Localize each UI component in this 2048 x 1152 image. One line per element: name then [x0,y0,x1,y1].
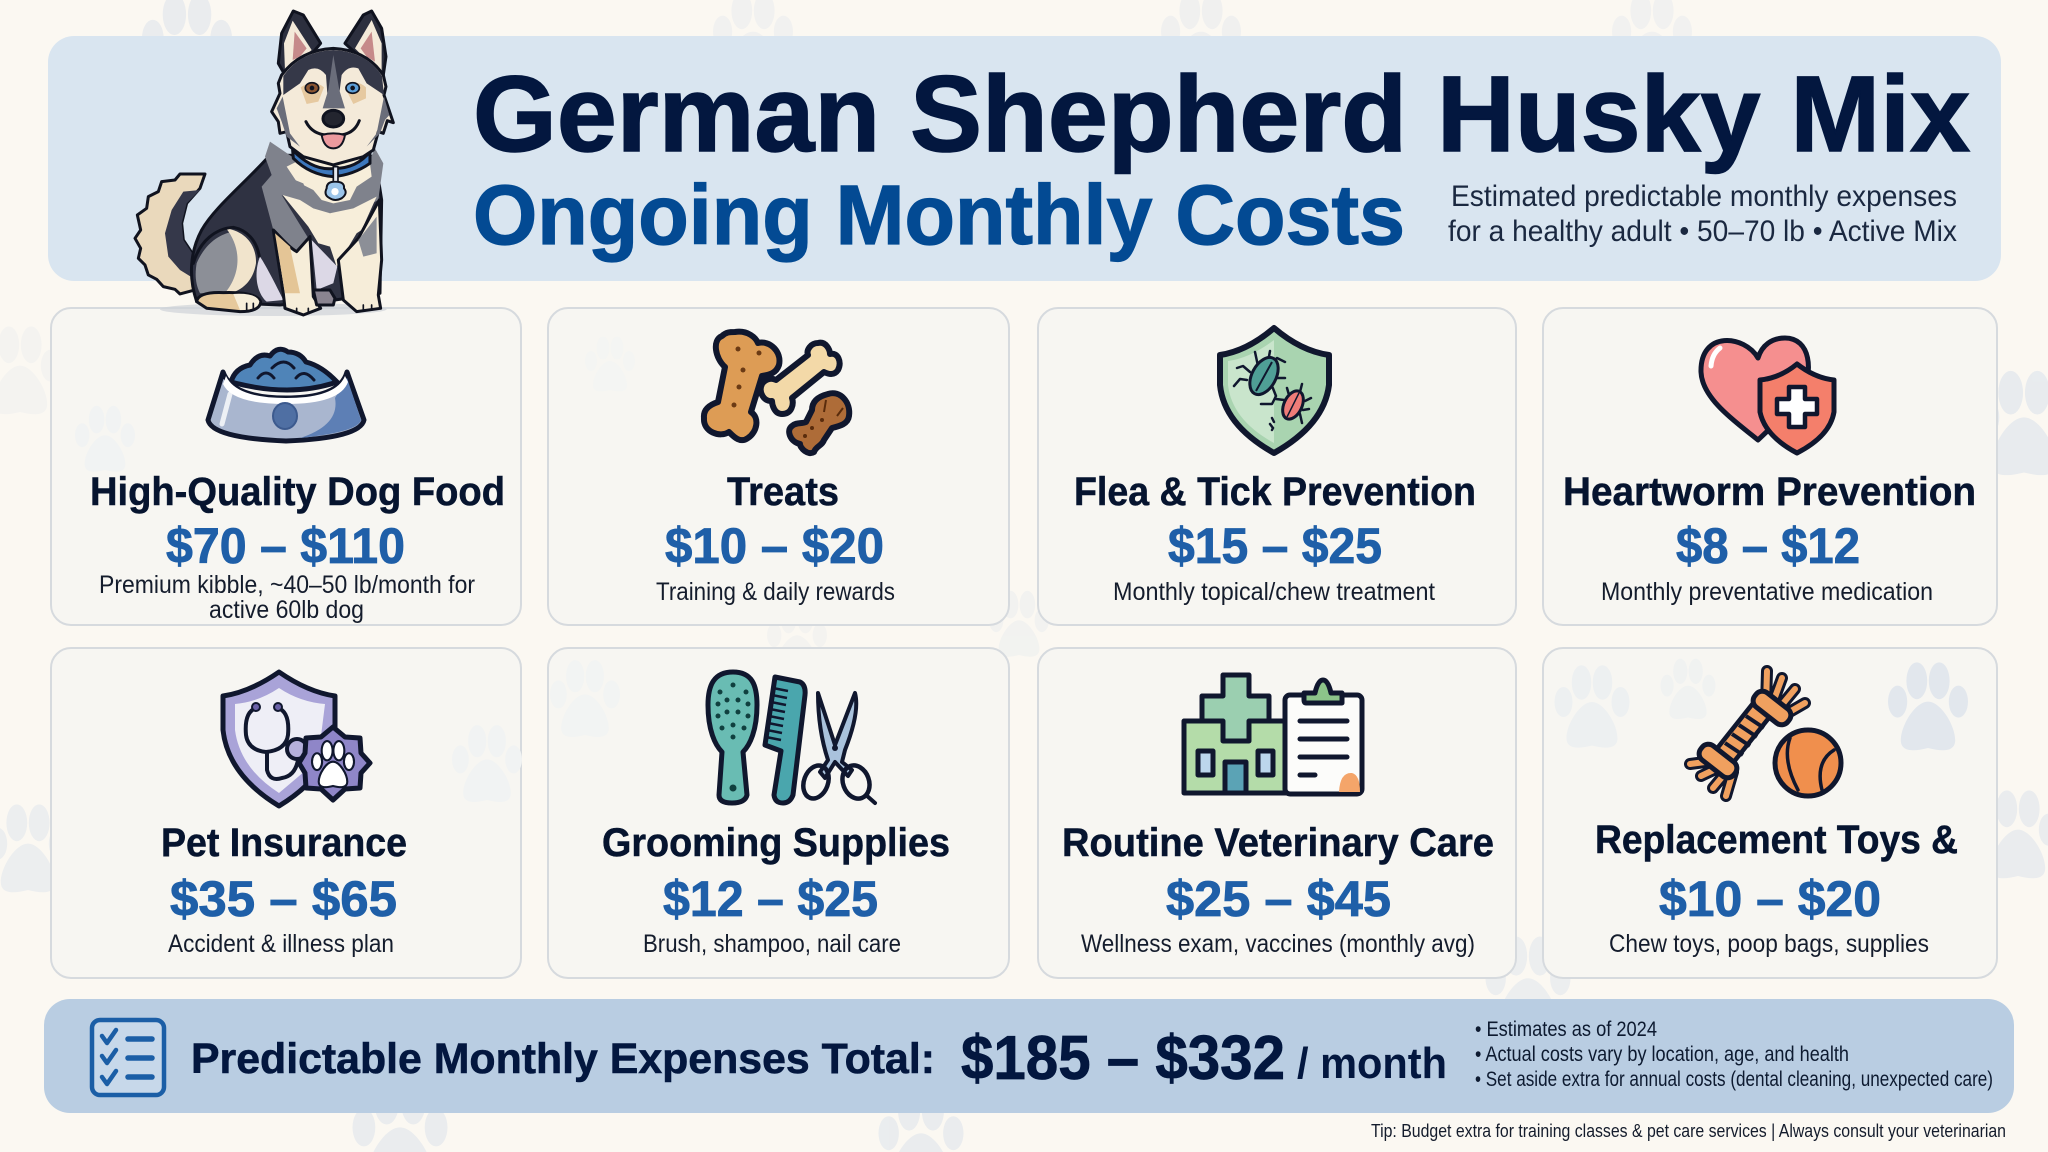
header banner [48,36,2001,281]
price: $10 – $20 [1659,871,1881,927]
card title: Heartworm Prevention [1563,470,1976,514]
icon: rope toy and ball [1690,671,1841,796]
description: active 60lb dog [209,596,364,624]
tail [135,174,205,294]
price: $10 – $20 [665,518,884,574]
description: Accident & illness plan [168,930,394,958]
price: $70 – $110 [166,518,405,574]
footer total bar [44,999,2014,1113]
collar [293,150,370,200]
price: $35 – $65 [170,871,397,927]
card title: Treats [727,470,839,514]
icon: insurance shield with stethoscope [223,672,370,806]
head [272,48,393,165]
price: $25 – $45 [1166,871,1391,927]
title: German Shepherd Husky Mix [473,53,1970,174]
header description: Estimated predictable monthly expenses [1451,180,1957,213]
card title: Replacement Toys & [1595,818,1958,862]
icon: vet clinic and clipboard [1184,675,1362,794]
card: flea and tick prevention [1038,308,1516,625]
legs [247,200,382,315]
card: heartworm prevention [1543,308,1997,625]
per month unit: / month [1297,1039,1447,1088]
description: Monthly topical/chew treatment [1113,578,1435,606]
total amount: $185 – $332 [961,1024,1285,1093]
card title: Flea & Tick Prevention [1074,470,1476,514]
card title: High-Quality Dog Food [90,470,505,514]
card: pet insurance [51,648,522,978]
price: $12 – $25 [663,871,878,927]
icon: checklist [92,1020,164,1095]
card: routine veterinary care [1038,648,1516,978]
description: Monthly preventative medication [1601,578,1933,606]
price: $8 – $12 [1676,518,1860,574]
description: Brush, shampoo, nail care [643,930,901,958]
card title: Routine Veterinary Care [1062,821,1494,865]
total label: Predictable Monthly Expenses Total: [191,1035,935,1083]
description: Chew toys, poop bags, supplies [1609,930,1929,958]
description: Premium kibble, ~40–50 lb/month for [99,571,475,599]
header description [1448,180,1957,248]
card: treats [548,308,1009,625]
icon: brush, comb and scissors [708,672,875,803]
card title: Grooming Supplies [602,821,950,865]
subtitle: Ongoing Monthly Costs [473,168,1405,262]
body [191,142,383,312]
card: high-quality dog food [51,308,521,625]
illustration: husky dog [135,11,393,316]
footer notes: • Estimates as of 2024 [1475,1018,1657,1041]
icon: shield with bugs [1220,328,1329,453]
icon: dog treats [704,332,849,453]
footer notes [1475,1018,1993,1091]
header description: for a healthy adult • 50–70 lb • Active Mix [1448,215,1957,248]
card title: Pet Insurance [161,821,407,865]
description: Wellness exam, vaccines (monthly avg) [1081,930,1475,958]
price: $15 – $25 [1168,518,1382,574]
description: Training & daily rewards [656,578,895,606]
description [99,571,475,624]
ears [278,11,386,75]
card: grooming supplies [548,648,1009,978]
footer notes: • Actual costs vary by location, age, and health [1475,1043,1849,1066]
icon: dog food bowl [208,349,364,441]
card: replacement toys [1543,648,1997,978]
icon: heart with shield [1701,338,1834,453]
